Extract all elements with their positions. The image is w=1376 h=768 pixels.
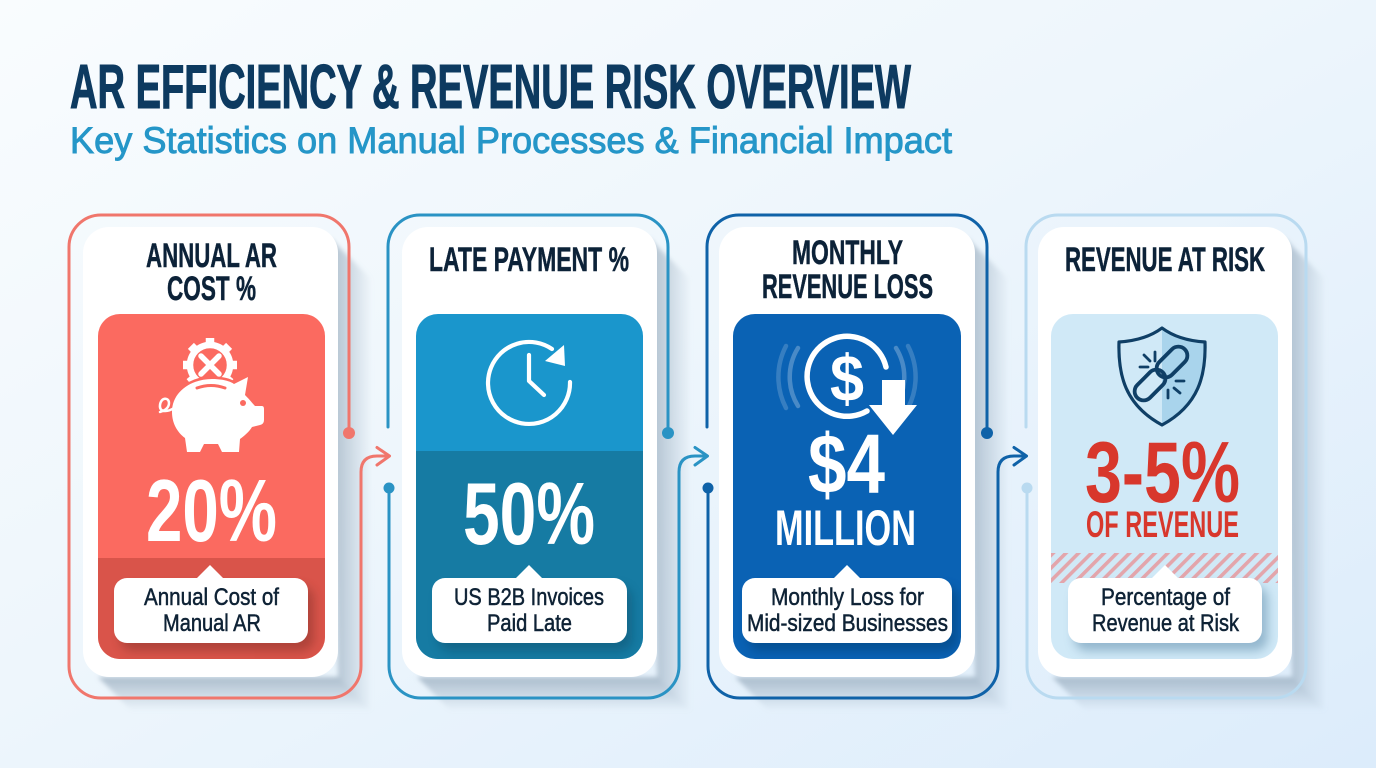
callout: Percentage of xyxy=(1101,584,1230,611)
callout: Annual Cost of xyxy=(144,584,279,611)
callout xyxy=(1068,565,1268,651)
card xyxy=(83,227,338,677)
connector outline xyxy=(707,215,1025,698)
stat: 3-5% of revenue: 3-5% xyxy=(1085,425,1240,521)
stat panel xyxy=(733,314,961,659)
stat panel xyxy=(1051,314,1278,659)
connector dots xyxy=(384,427,674,494)
stat: 20%: 20% xyxy=(146,461,277,560)
icon: piggy bank and gear xyxy=(160,338,264,452)
stat: $4 million: MILLION xyxy=(775,500,916,556)
stat: $4 million xyxy=(775,417,916,556)
icon: shield with broken chain xyxy=(1119,328,1205,425)
connector arrow xyxy=(1014,448,1026,465)
stat: $4 million: $4 xyxy=(808,417,885,511)
card xyxy=(719,227,975,677)
callout: US B2B Invoices xyxy=(454,584,604,611)
connector dot xyxy=(1022,482,1032,494)
callout: Revenue at Risk xyxy=(1092,610,1240,637)
heading: ANNUAL AR xyxy=(146,237,277,275)
heading: REVENUE AT RISK xyxy=(1065,241,1265,279)
stat: 3-5% of revenue: OF REVENUE xyxy=(1086,504,1239,545)
callout: Paid Late xyxy=(487,610,572,637)
panel: late payment xyxy=(384,215,708,711)
callout: Mid-sized Businesses xyxy=(747,610,948,637)
icon: dollar with down arrow: $ xyxy=(830,341,864,415)
connector dots xyxy=(702,427,993,494)
callout xyxy=(114,565,314,651)
panel: revenue at risk xyxy=(1022,215,1326,711)
heading: COST % xyxy=(167,270,256,308)
card xyxy=(402,227,657,677)
card shadow xyxy=(417,238,691,711)
icon: clock with arrow xyxy=(488,342,570,424)
heading xyxy=(762,234,933,306)
card shadow xyxy=(98,238,372,711)
heading xyxy=(146,237,277,308)
callout xyxy=(432,565,632,651)
connector arrow xyxy=(377,448,390,465)
callout: Manual AR xyxy=(163,610,261,637)
callout xyxy=(742,565,958,651)
connector outline xyxy=(388,215,706,698)
heading: MONTHLY xyxy=(792,234,903,272)
connector outline xyxy=(1026,215,1306,698)
stat: 50%: 50% xyxy=(463,464,595,563)
connector arrow xyxy=(695,448,708,465)
connector outline xyxy=(69,215,388,698)
stat panel xyxy=(98,314,325,659)
stat: 3-5% of revenue xyxy=(1085,425,1240,545)
icon: dollar with down arrow xyxy=(778,336,917,435)
heading: LATE PAYMENT % xyxy=(429,241,629,279)
card shadow xyxy=(735,238,1009,711)
stat panel xyxy=(416,314,643,659)
panel: annual AR cost xyxy=(69,215,390,711)
heading: REVENUE LOSS xyxy=(762,268,933,306)
hatched band xyxy=(1051,553,1278,583)
panel: monthly revenue loss xyxy=(702,215,1026,711)
callout: Monthly Loss for xyxy=(771,584,924,611)
connector dot xyxy=(343,427,355,439)
card shadow xyxy=(1052,238,1326,711)
card xyxy=(1038,227,1292,677)
title block xyxy=(70,53,953,161)
subtitle: Key Statistics on Manual Processes & Financial Impact xyxy=(70,120,953,161)
